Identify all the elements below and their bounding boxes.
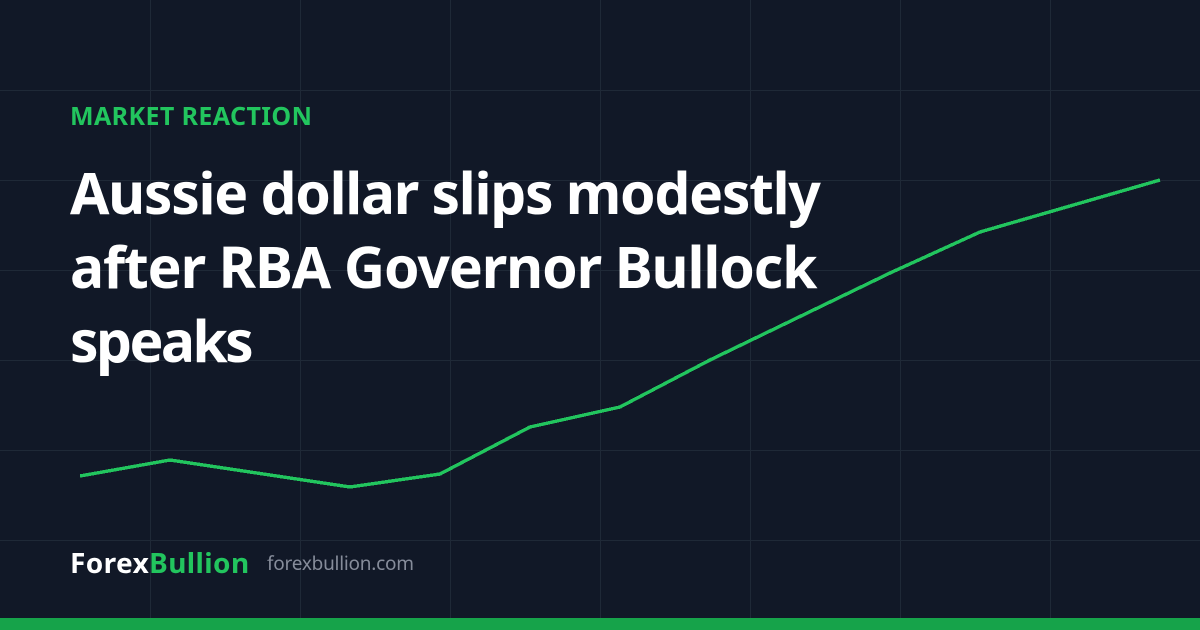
site url: forexbullion.com bbox=[267, 550, 414, 576]
bottom accent bar bbox=[0, 618, 1200, 630]
title bbox=[70, 153, 821, 379]
title: Aussie dollar slips modestly bbox=[70, 153, 820, 231]
title: speaks bbox=[70, 301, 251, 379]
brand logo: ForexBullion bbox=[70, 544, 250, 582]
price line bbox=[80, 180, 1160, 487]
title: after RBA Governor Bullock bbox=[70, 227, 816, 305]
eyebrow label: MARKET REACTION bbox=[70, 99, 312, 133]
